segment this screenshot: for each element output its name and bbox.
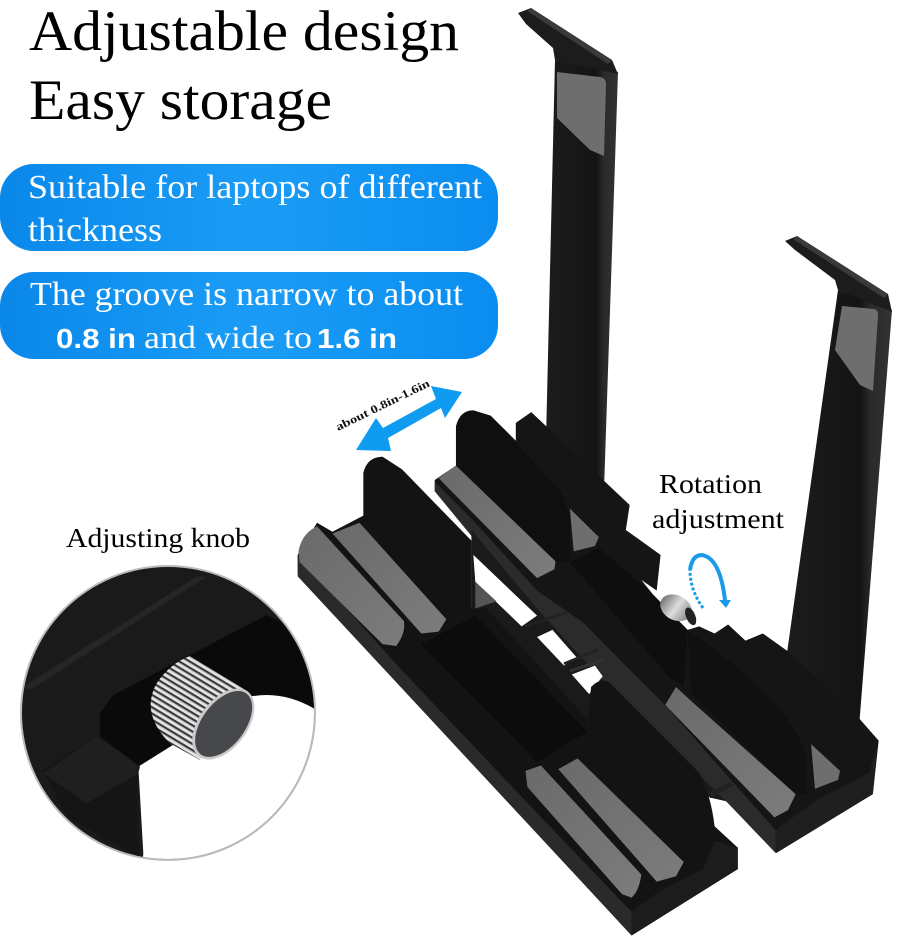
label: rotation adjustment — [652, 468, 784, 534]
small knob — [655, 589, 698, 627]
title: Adjustable design — [29, 0, 459, 63]
callout: suitable for laptops — [0, 164, 498, 251]
title: Easy storage — [29, 69, 332, 132]
magnified knob detail — [20, 565, 316, 861]
callout: groove width: 1.6 in — [317, 323, 397, 354]
front base section — [298, 457, 738, 935]
label: adjusting knob: Adjusting knob — [66, 522, 250, 553]
callout: groove width — [0, 272, 498, 359]
product: stand base — [298, 410, 879, 935]
width arrow: about 0.8in-1.6in — [334, 377, 433, 434]
label: rotation adjustment: adjustment — [652, 503, 784, 534]
width arrow — [334, 377, 462, 451]
tall front arm — [785, 236, 892, 740]
callout: suitable for laptops: thickness — [28, 212, 162, 249]
title — [29, 0, 459, 132]
tall rear arm — [518, 8, 618, 490]
bed, white gaps and rods — [471, 530, 738, 844]
callout: groove width: The groove is narrow to about — [30, 276, 464, 313]
callout: groove width: and wide to — [144, 319, 312, 355]
callout: groove width: 0.8 in — [56, 323, 136, 354]
callout: suitable for laptops: Suitable for laptops of different — [28, 169, 483, 206]
rear base section — [435, 410, 879, 853]
label: rotation adjustment: Rotation — [659, 468, 762, 499]
icon: rotation arrow — [690, 555, 731, 608]
